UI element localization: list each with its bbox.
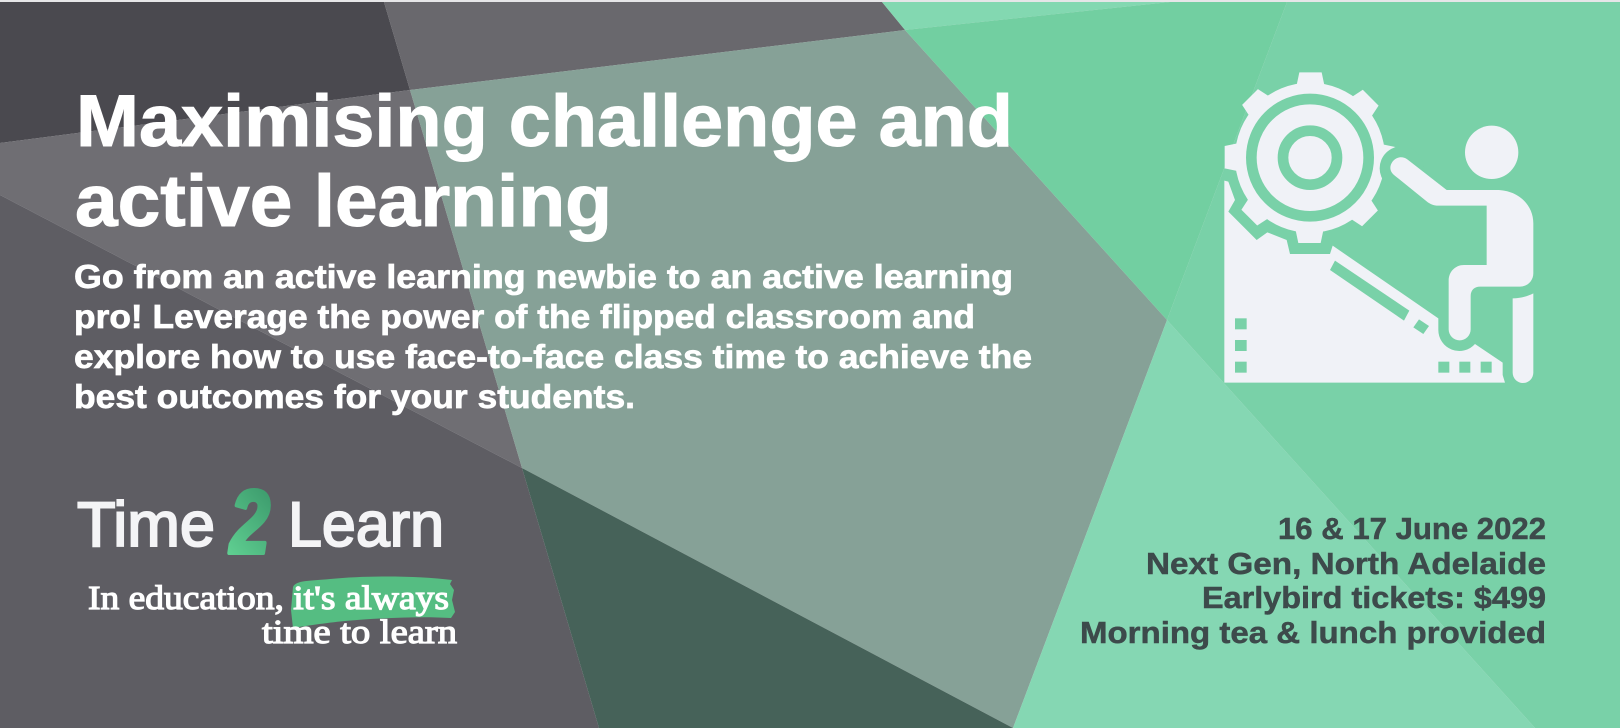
event details: 16 & 17 June 2022 [1278, 511, 1546, 546]
icon: slope [1224, 181, 1505, 383]
icon: person [1390, 126, 1533, 383]
event details: Morning tea & lunch provided [1080, 615, 1546, 650]
brush highlight [291, 576, 455, 628]
logo: Time 2 Learn: Learn [288, 490, 444, 560]
description paragraph: explore how to use face-to-face class time to achieve the [74, 338, 1032, 375]
title: Maximising challenge and [76, 81, 1013, 162]
logo: Time 2 Learn: Time [77, 490, 215, 560]
title [75, 81, 1013, 242]
tagline with brush highlight: time to learn [262, 614, 457, 651]
title: active learning [75, 161, 612, 242]
event details [1080, 511, 1546, 650]
icon: gear [1224, 72, 1396, 243]
description paragraph [74, 258, 1032, 415]
event details: Next Gen, North Adelaide [1146, 546, 1546, 581]
tagline with brush highlight: In education, it's always [88, 580, 449, 617]
description paragraph: best outcomes for your students. [74, 378, 635, 415]
tagline with brush highlight [88, 576, 457, 651]
event details: Earlybird tickets: $499 [1202, 580, 1546, 615]
description paragraph: pro! Leverage the power of the flipped classroom and [74, 298, 975, 335]
logo: Time 2 Learn: 2 [228, 473, 270, 573]
icon: person turning a gear on a slope [1224, 72, 1533, 383]
description paragraph: Go from an active learning newbie to an active learning [74, 258, 1013, 295]
logo: Time 2 Learn [77, 473, 444, 573]
